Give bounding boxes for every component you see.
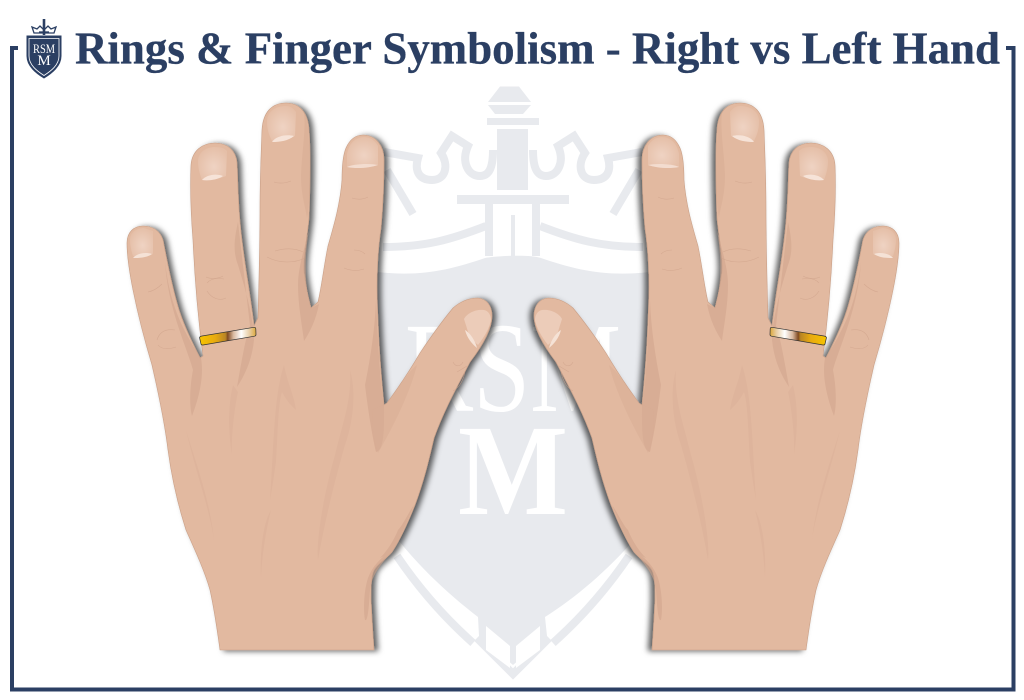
logo shield	[27, 36, 61, 78]
watermark: crown	[383, 136, 643, 247]
logo	[27, 19, 61, 78]
right-side hand with ring	[534, 103, 899, 650]
logo monogram: RSM	[33, 41, 55, 56]
title: Rings & Finger Symbolism - Right vs Left Hand	[75, 22, 1000, 74]
watermark: base chevrons	[486, 626, 540, 668]
watermark: monogram top row: RSM	[405, 297, 621, 439]
watermark: monogram M: M	[458, 399, 568, 543]
watermark: shield outer edge	[397, 556, 629, 674]
left-side hand with ring	[127, 103, 492, 650]
logo monogram: M	[37, 53, 51, 69]
watermark: shield body	[376, 256, 650, 665]
logo monogram	[33, 41, 55, 69]
watermark crest	[376, 86, 650, 674]
logo crown	[32, 19, 56, 35]
watermark: sword pommel and crossguard	[457, 86, 569, 256]
